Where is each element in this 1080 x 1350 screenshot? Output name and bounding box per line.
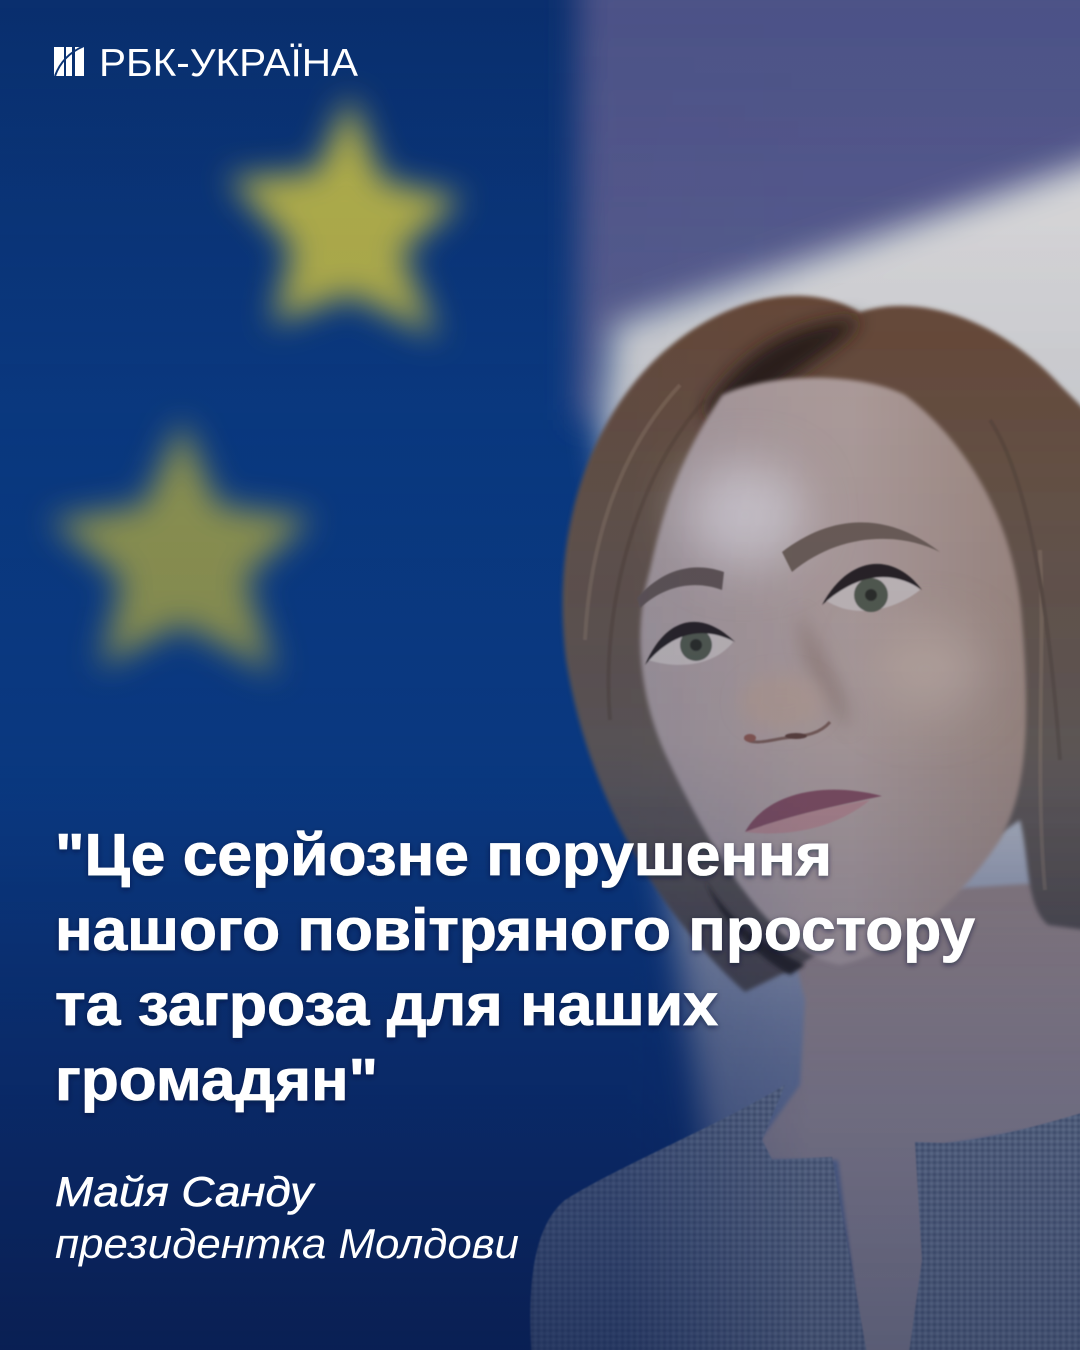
jacket — [530, 1085, 1080, 1350]
hair — [562, 296, 1080, 992]
speaker name: Майя Санду — [55, 1168, 316, 1215]
portrait — [530, 296, 1080, 1350]
star upper — [228, 95, 462, 338]
hair shadow lower — [705, 880, 805, 975]
logo — [54, 42, 358, 85]
cheek highlight — [870, 625, 980, 715]
left eye — [645, 622, 735, 665]
logo wordmark: РБК-УКРАЇНА — [99, 42, 358, 85]
logo mark — [54, 46, 84, 76]
hair strands — [585, 385, 1060, 890]
headline quote: нашого повітряного простору — [55, 897, 975, 963]
speaker role: президентка Молдови — [55, 1220, 519, 1267]
forehead highlight — [685, 463, 805, 567]
star lower — [50, 420, 312, 675]
hair shadow at part — [705, 318, 860, 430]
eyebrows — [637, 567, 724, 608]
headline quote: громадян" — [55, 1047, 378, 1113]
mouth — [745, 790, 882, 833]
headline quote — [55, 822, 975, 1113]
headline quote: "Це серйозне порушення — [55, 822, 832, 888]
right eye — [822, 564, 922, 612]
grey-purple backdrop panel — [578, 0, 1080, 420]
nostrils — [744, 722, 830, 742]
headline quote: та загроза для наших — [55, 972, 718, 1038]
attribution — [55, 1168, 519, 1267]
face — [640, 378, 1026, 965]
nose — [740, 674, 824, 730]
nose side shadow — [799, 610, 850, 730]
light wall — [600, 145, 1080, 1250]
neck and chest — [760, 880, 1080, 1350]
